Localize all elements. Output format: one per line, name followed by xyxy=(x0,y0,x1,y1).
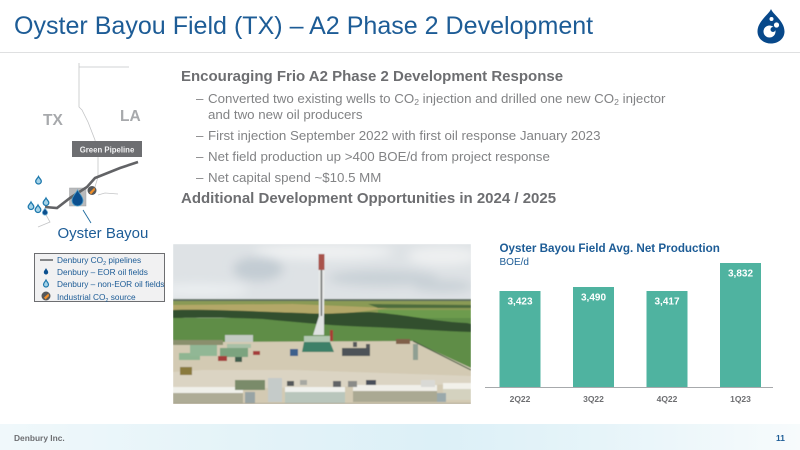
leader line xyxy=(83,210,91,223)
pipeline xyxy=(45,162,138,208)
state border xyxy=(38,63,129,227)
title: Oyster Bayou Field (TX) – A2 Phase 2 Development xyxy=(14,12,593,40)
bar 4Q22: 3,417 xyxy=(654,296,680,308)
EOR field xyxy=(42,208,48,215)
footer band xyxy=(0,424,800,450)
bar 2Q22 xyxy=(500,291,540,387)
text: – xyxy=(196,91,203,106)
map label: TX: TX xyxy=(43,112,63,129)
chart: production xyxy=(485,242,773,404)
icon: company logo drop xyxy=(758,9,784,44)
icon: Oyster Bayou field drop xyxy=(72,190,83,206)
header divider xyxy=(0,52,800,53)
bar 1Q23: 3,832 xyxy=(728,268,753,280)
bullet: converted wells: Converted two existing wells to CO2 injection and drilled one new CO2 injector xyxy=(208,91,665,107)
chart title: Oyster Bayou Field Avg. Net Production xyxy=(500,242,720,255)
rig mast xyxy=(313,254,324,335)
map xyxy=(28,63,148,242)
legend xyxy=(34,253,165,302)
field highlight box xyxy=(70,188,86,206)
label: Green Pipeline xyxy=(72,141,142,157)
text block: development response: Encouraging Frio A2 Phase 2 Development Response xyxy=(181,68,563,85)
label: Oyster Bayou: Oyster Bayou xyxy=(58,225,148,242)
chart unit: BOE/d xyxy=(500,257,529,268)
bar 2Q22: 3,423 xyxy=(507,296,533,308)
x axis labels: 1Q23 xyxy=(730,394,751,404)
text: – xyxy=(196,128,203,143)
heading: additional opportunities: Additional Development Opportunities in 2024 / 2025 xyxy=(181,190,556,207)
non-EOR fields xyxy=(28,176,49,212)
x axis labels: 3Q22 xyxy=(583,394,604,404)
x axis labels xyxy=(510,394,751,404)
bar 3Q22: 3,490 xyxy=(581,292,606,304)
x axis labels: 4Q22 xyxy=(657,394,678,404)
bar 1Q23 xyxy=(720,263,761,387)
bullet: converted wells xyxy=(196,91,666,122)
map label: LA: LA xyxy=(120,108,141,125)
bullet: net production: Net field production up >400 BOE/d from project response xyxy=(208,149,550,164)
text: – xyxy=(196,170,203,185)
x axis labels: 2Q22 xyxy=(510,394,531,404)
text: – xyxy=(196,149,203,164)
legend item: non-EOR: Denbury – non-EOR oil fields xyxy=(57,279,164,289)
label: Green Pipeline: Green Pipeline xyxy=(80,146,135,154)
legend item: EOR: Denbury – EOR oil fields xyxy=(57,267,148,277)
bullet: converted wells: and two new oil producers xyxy=(208,107,362,122)
bullet: first injection: First injection September 2022 with first oil response January 2023 xyxy=(208,128,600,143)
legend item: CO2 source: Industrial CO2 source xyxy=(57,292,136,304)
bar 3Q22 xyxy=(573,287,614,387)
legend item: pipelines: Denbury CO2 pipelines xyxy=(57,255,141,267)
legend symbols xyxy=(40,259,53,300)
photo: drilling rig site xyxy=(173,244,471,404)
bar 4Q22 xyxy=(646,291,688,387)
bullet: capital spend: Net capital spend ~$10.5 MM xyxy=(208,170,381,185)
footer: company name: Denbury Inc. xyxy=(14,433,65,443)
icon: industrial CO2 source xyxy=(88,186,96,195)
footer: page number: 11 xyxy=(776,433,785,443)
